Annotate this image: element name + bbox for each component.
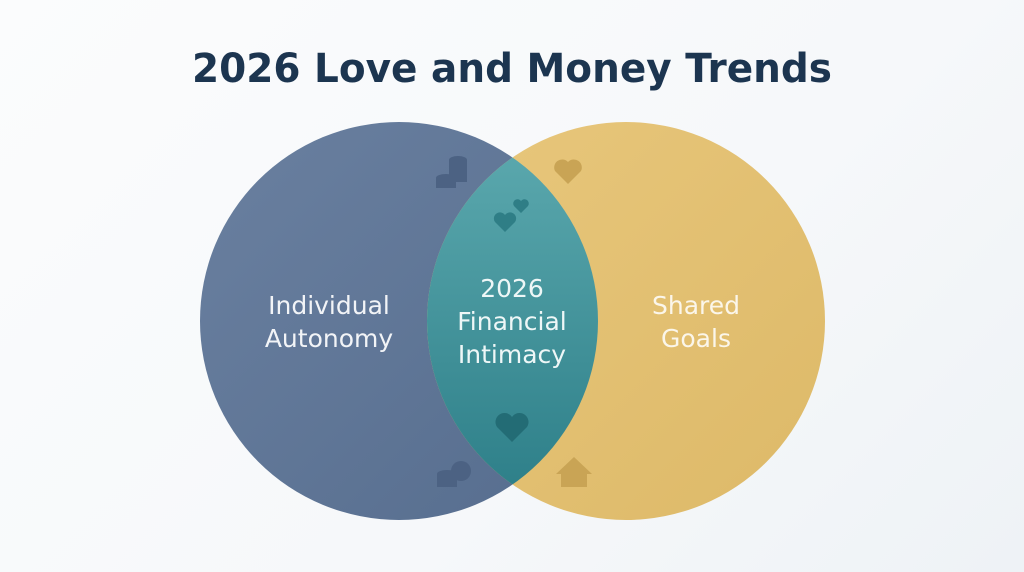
label: shared goals: Goals: [661, 324, 731, 353]
icon: heart top right: [554, 160, 582, 184]
circle: individual autonomy: [200, 122, 598, 520]
icon: coins bottom: [437, 461, 471, 487]
label: individual autonomy: Autonomy: [265, 324, 393, 353]
label: financial intimacy: 2026: [480, 274, 544, 303]
icon: heart bottom: [495, 413, 529, 442]
label: financial intimacy: Financial: [457, 307, 567, 336]
icon: house: [556, 457, 592, 487]
title: 2026 Love and Money Trends: [192, 46, 832, 92]
intersection: financial intimacy: [427, 158, 598, 484]
label: shared goals: Shared: [652, 291, 740, 320]
label: financial intimacy: Intimacy: [458, 340, 566, 369]
icon: coins top: [436, 156, 467, 188]
circle: shared goals: [427, 122, 825, 520]
icon: hearts: [494, 199, 529, 232]
label: individual autonomy: Individual: [268, 291, 390, 320]
